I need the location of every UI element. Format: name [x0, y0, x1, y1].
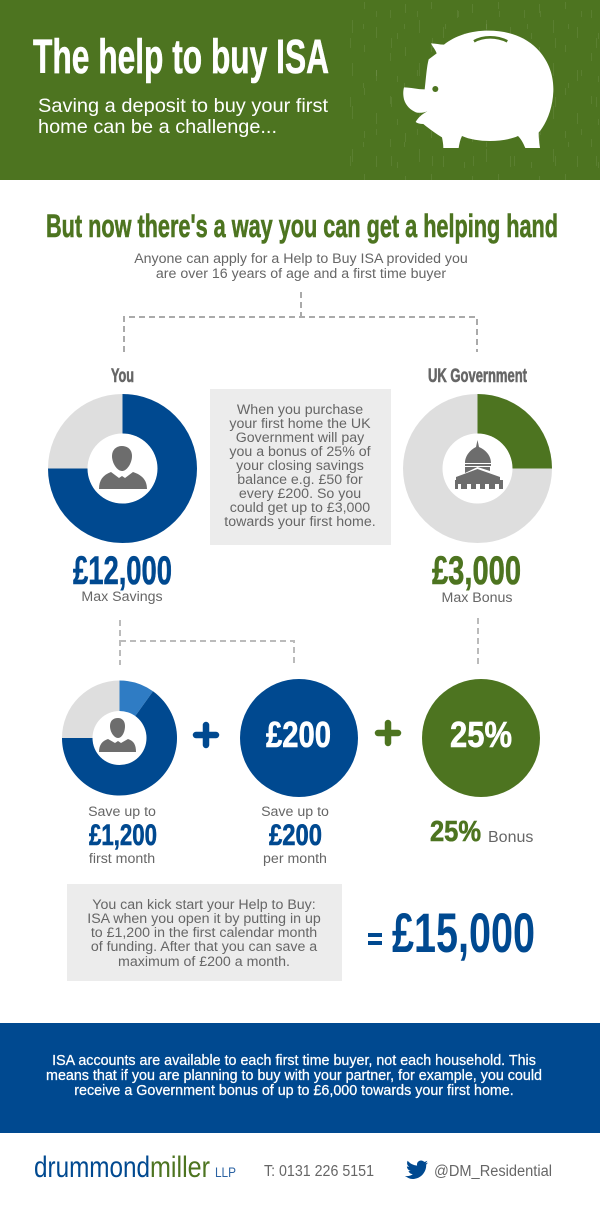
stat: first month saving	[88, 804, 157, 867]
panel: household note: means that if you are planning to buy with your partner, for example, you could	[46, 1068, 542, 1084]
stat: 25 percent bonus: Bonus	[488, 829, 533, 846]
stat: monthly saving: £200	[269, 819, 322, 852]
text block: government bonus: your first home the UK	[229, 416, 371, 432]
stat: first month saving: £1,200	[89, 819, 157, 852]
stat: max bonus: £3,000	[432, 549, 521, 593]
chart: you donut	[48, 394, 197, 543]
text block: government bonus: When you purchase	[237, 402, 363, 418]
logo: drummondmiller LLP: drummond	[34, 1151, 150, 1184]
connector: eligibility to you and government	[124, 292, 477, 352]
stat: monthly saving	[261, 804, 329, 867]
text block: government bonus: your closing savings	[236, 458, 364, 474]
text block: government bonus: every £200. So you	[239, 486, 361, 502]
icon: twitter bird	[405, 1161, 428, 1179]
icon: person	[99, 446, 147, 489]
subtitle: Saving a deposit to buy your first	[38, 95, 329, 117]
contact: telephone: T: 0131 226 5151	[264, 1163, 374, 1180]
stat: total: £15,000	[392, 901, 535, 964]
stat: max savings: Max Savings	[81, 589, 163, 605]
text block: eligibility	[134, 251, 468, 282]
text block: kick start: You can kick start your Help to Buy:	[92, 897, 316, 913]
panel: household note: receive a Government bonus of up to £6,000 towards your first home.	[74, 1083, 514, 1099]
stat circle: 200 pounds	[240, 679, 358, 797]
text block: government bonus: balance e.g. £50 for	[237, 472, 363, 488]
chart: government donut	[403, 394, 552, 543]
panel: household note: ISA accounts are available to each first time buyer, not each household. This	[52, 1053, 536, 1069]
panel: header banner	[0, 0, 600, 180]
chart: first month donut	[62, 680, 177, 796]
icon: person small	[99, 718, 136, 752]
text block: kick start: ISA when you open it by putting in up	[87, 911, 321, 927]
label: UK Government: UK Government	[428, 366, 527, 387]
text block: eligibility: Anyone can apply for a Help to Buy ISA provided you	[134, 251, 468, 267]
icon: piggy bank	[403, 31, 553, 148]
stat: 25 percent bonus: 25%	[430, 816, 481, 848]
text block: eligibility: are over 16 years of age and a first time buyer	[156, 266, 446, 282]
text block: government bonus	[210, 389, 391, 545]
text block: government bonus: you a bonus of 25% of	[229, 444, 371, 460]
connector: bonus to percentage	[477, 618, 479, 665]
stat: first month saving: first month	[89, 851, 155, 867]
stat circle: 200 pounds: £200	[266, 714, 331, 755]
title: The help to buy ISA	[33, 31, 329, 84]
contact: twitter handle: @DM_Residential	[434, 1163, 552, 1180]
text block: kick start: of funding. After that you can save a	[91, 939, 317, 955]
stat: max savings	[73, 549, 172, 605]
subtitle	[38, 95, 329, 138]
text block: kick start: to £1,200 in the first calendar month	[91, 925, 317, 941]
stat circle: 25 percent	[422, 679, 540, 797]
stat: monthly saving: Save up to	[261, 804, 329, 820]
connector: savings to contributions	[120, 620, 294, 665]
text block: government bonus: towards your first home.	[224, 514, 376, 530]
stat: max bonus	[432, 549, 521, 606]
text block: government bonus: Government will pay	[236, 430, 365, 446]
stat: 25 percent bonus	[430, 816, 533, 848]
logo: drummondmiller LLP: miller	[150, 1151, 210, 1184]
icon: parliament dome	[455, 440, 503, 489]
logo: drummondmiller LLP: LLP	[215, 1164, 236, 1180]
stat: max bonus: Max Bonus	[442, 590, 512, 606]
stat: total	[368, 901, 535, 964]
icon: green plus	[378, 723, 398, 743]
icon: blue plus	[196, 725, 216, 745]
stat: first month saving: Save up to	[88, 804, 156, 820]
stat: monthly saving: per month	[263, 851, 327, 867]
stat circle: 25 percent: 25%	[450, 714, 512, 755]
text block: government bonus: could get up to £3,000	[230, 500, 370, 516]
text block: kick start: maximum of £200 a month.	[118, 954, 290, 970]
stat: max savings: £12,000	[73, 549, 172, 593]
text block: kick start	[67, 884, 342, 981]
subtitle: home can be a challenge...	[38, 116, 277, 138]
panel: household note	[0, 1023, 600, 1133]
label: You: You	[111, 366, 134, 387]
